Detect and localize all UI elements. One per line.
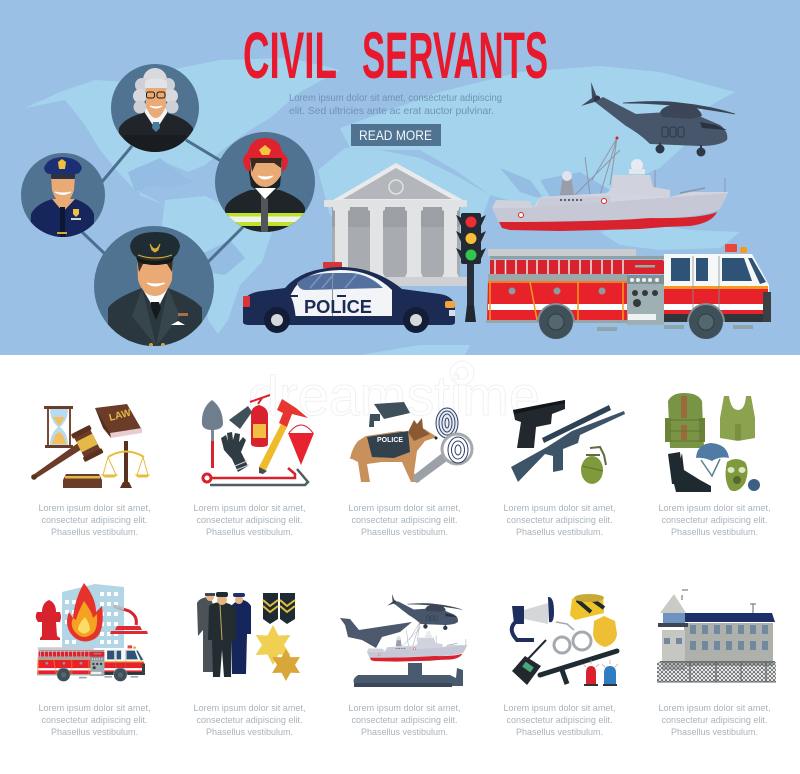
police dog: POLICE <box>377 437 403 444</box>
panel: officers and insignia icons <box>197 592 300 681</box>
prison fence <box>657 661 776 682</box>
network connector lines <box>82 140 243 262</box>
walkie talkie <box>512 640 546 685</box>
government building <box>324 163 469 286</box>
traffic light <box>456 213 486 322</box>
intro text <box>289 92 502 117</box>
text block: column 1 row 1: consectetur adipiscing elit. <box>42 515 148 526</box>
gavel block <box>63 474 102 488</box>
read more button: READ MORE <box>359 128 432 143</box>
text block: column 1 row 2: Phasellus vestibulum. <box>51 727 138 738</box>
panel: military gear icons <box>665 393 760 492</box>
text block: column 4 row 2: consectetur adipiscing elit. <box>506 715 612 726</box>
shovel <box>202 400 223 468</box>
text block: column 2 row 2: consectetur adipiscing elit. <box>196 715 302 726</box>
fingerprint <box>436 408 458 438</box>
crowbars <box>203 468 308 485</box>
fighter jet <box>340 618 412 648</box>
helicopter <box>581 82 735 156</box>
shoulder epaulets <box>263 593 295 624</box>
text block: column 1 row 2: Lorem ipsum dolor sit amet, <box>38 703 150 714</box>
siren lights <box>583 660 618 686</box>
pistol <box>513 400 565 448</box>
three officers <box>197 592 251 677</box>
text block: column 5 row 1: Phasellus vestibulum. <box>671 527 758 538</box>
text block: column 2 row 2 <box>194 703 306 738</box>
text block: column 4 row 2: Lorem ipsum dolor sit amet, <box>504 703 616 714</box>
text block: column 3 row 2: consectetur adipiscing elit. <box>352 715 458 726</box>
fire hydrant <box>36 600 61 640</box>
text block: column 4 row 1: Lorem ipsum dolor sit amet, <box>504 503 616 514</box>
world map <box>25 58 740 355</box>
gavel <box>31 425 104 480</box>
avatar: firefighter <box>215 132 315 232</box>
text block: column 5 row 1 <box>658 503 770 538</box>
small ship <box>367 621 467 662</box>
text block: column 4 row 1: consectetur adipiscing elit. <box>506 515 612 526</box>
gas mask <box>726 459 760 491</box>
helmet <box>696 443 729 476</box>
navy ship <box>492 136 728 231</box>
fire hose <box>110 606 148 634</box>
text block: column 1 row 2 <box>38 703 150 738</box>
small fire truck <box>37 645 145 681</box>
intro text: Lorem ipsum dolor sit amet, consectetur adipiscing <box>289 92 502 104</box>
megaphone <box>512 597 554 640</box>
text block: column 2 row 1: Lorem ipsum dolor sit amet, <box>194 503 306 514</box>
handcuffs <box>554 622 591 653</box>
text block: column 3 row 2: Phasellus vestibulum. <box>361 727 448 738</box>
text block: column 3 row 2 <box>348 703 460 738</box>
security camera <box>369 402 410 427</box>
panel: firefighter tools icons <box>202 395 314 485</box>
panel: justice icons <box>31 404 149 488</box>
hourglass <box>44 406 73 448</box>
tactical vest <box>720 396 755 441</box>
panel: police detective icons <box>350 402 472 483</box>
text block: column 2 row 2: Lorem ipsum dolor sit amet, <box>194 703 306 714</box>
text block: column 4 row 2: Phasellus vestibulum. <box>516 727 603 738</box>
text block: column 2 row 1: consectetur adipiscing elit. <box>196 515 302 526</box>
police car <box>243 262 455 333</box>
text block: column 5 row 2: consectetur adipiscing elit. <box>662 715 768 726</box>
text block: column 5 row 1: consectetur adipiscing elit. <box>662 515 768 526</box>
flame <box>67 583 103 642</box>
text block: column 1 row 2: consectetur adipiscing elit. <box>42 715 148 726</box>
backpack <box>665 393 705 448</box>
gloves <box>221 432 249 472</box>
text block: column 5 row 2: Lorem ipsum dolor sit amet, <box>658 703 770 714</box>
extinguisher <box>229 395 270 447</box>
text block: column 2 row 1 <box>194 503 306 538</box>
text block: column 3 row 1: Lorem ipsum dolor sit amet, <box>348 503 460 514</box>
map inland seas <box>128 118 610 275</box>
law book: LAW <box>108 407 133 424</box>
text block: column 1 row 1 <box>38 503 150 538</box>
police badge <box>593 616 617 647</box>
text block: column 1 row 1: Lorem ipsum dolor sit amet, <box>38 503 150 514</box>
text block: column 3 row 1: Phasellus vestibulum. <box>361 527 448 538</box>
watermark: dreamstime <box>248 364 540 427</box>
title <box>243 18 548 92</box>
sniper rifle <box>511 405 625 482</box>
combat boots <box>668 452 711 492</box>
small helicopter <box>387 594 462 630</box>
magnifier with fingerprint <box>413 434 472 483</box>
text block: column 2 row 1: Phasellus vestibulum. <box>206 527 293 538</box>
text block: column 4 row 1: Phasellus vestibulum. <box>516 527 603 538</box>
text block: column 5 row 2: Phasellus vestibulum. <box>671 727 758 738</box>
building <box>62 584 124 648</box>
text block: column 2 row 2: Phasellus vestibulum. <box>206 727 293 738</box>
baton <box>540 651 617 684</box>
fire truck <box>486 244 771 339</box>
title: SERVANTS <box>362 18 548 92</box>
prison building <box>658 590 775 670</box>
text block: column 5 row 1: Lorem ipsum dolor sit amet, <box>658 503 770 514</box>
submarine <box>354 663 463 687</box>
text block: column 3 row 2: Lorem ipsum dolor sit amet, <box>348 703 460 714</box>
grenade <box>581 447 606 484</box>
text block: column 1 row 1: Phasellus vestibulum. <box>51 527 138 538</box>
fire axe <box>259 399 308 474</box>
avatar: judge <box>111 64 199 152</box>
panel: header banner <box>0 0 800 355</box>
text block: column 3 row 1 <box>348 503 460 538</box>
scales of justice <box>102 441 149 488</box>
panel: police equipment icons <box>512 594 618 686</box>
panel: weapons icons <box>511 400 625 484</box>
avatar: police officer <box>21 153 105 237</box>
text block: column 3 row 1: consectetur adipiscing elit. <box>352 515 458 526</box>
panel: prison icon <box>657 590 776 682</box>
barrier tape <box>570 594 604 620</box>
intro text: elit. Sed ultricies ante ac erat auctor pulvinar. <box>289 105 494 117</box>
text block: column 4 row 1 <box>504 503 616 538</box>
sheriff stars <box>256 625 300 681</box>
read more button <box>351 124 441 146</box>
panel: air sea forces icons <box>340 594 467 687</box>
panel: fire scene icons <box>36 583 148 681</box>
avatar: pilot <box>94 226 214 347</box>
text block: column 4 row 2 <box>504 703 616 738</box>
fire bucket <box>288 425 314 465</box>
title: CIVIL <box>243 18 337 92</box>
police car: POLICE <box>304 297 372 317</box>
text block: column 5 row 2 <box>658 703 770 738</box>
